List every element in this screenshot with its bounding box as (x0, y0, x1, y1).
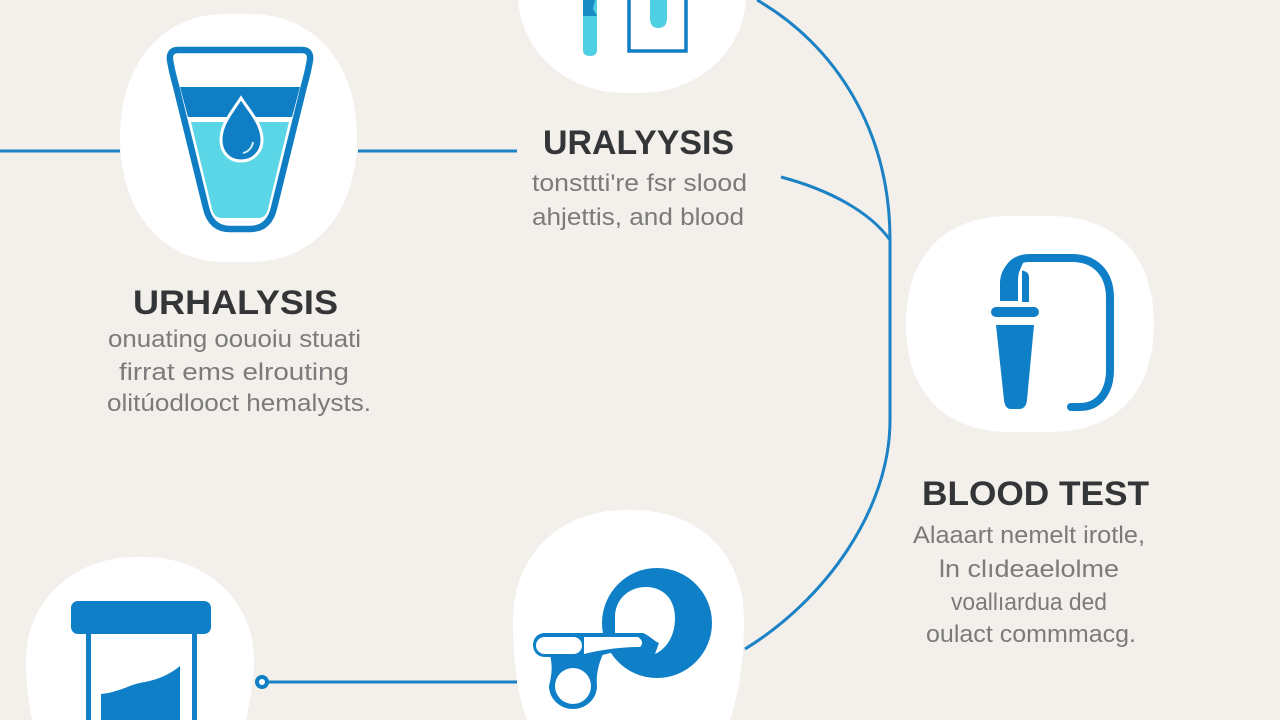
panel: urine cup card (120, 14, 357, 262)
icon: specimen jar (71, 601, 211, 720)
panel: swab and ring card (513, 510, 744, 720)
text block: left description (107, 326, 371, 417)
heading: middle urinalysis: URALYYSIS (543, 124, 734, 162)
text block: left description: firrat ems elrouting (119, 359, 349, 386)
text block: blood test description: Alaaart nemelt irotle, (913, 522, 1145, 549)
icon: test tube and vial (583, 0, 686, 56)
panel: test tube card (518, 0, 746, 93)
icon: dropper with tube (991, 256, 1110, 409)
card background (906, 216, 1154, 432)
text block: middle description (532, 170, 747, 231)
text block: blood test description: voallıardua ded (951, 589, 1107, 616)
panel: specimen jar card (26, 557, 254, 720)
text block: left description: olitúodlooct hemalysts. (107, 390, 371, 417)
card background (26, 557, 254, 720)
panel: blood test card (906, 216, 1154, 432)
icon: urine cup with drop (170, 50, 310, 229)
text block: middle description: tonsttti're fsr slood (532, 170, 747, 197)
card background (120, 14, 357, 262)
connector lines (0, 0, 890, 682)
text block: left description: onuating oouoiu stuati (108, 326, 361, 353)
card background (513, 510, 744, 720)
heading: left urinalysis: URHALYSIS (133, 284, 338, 322)
text block: blood test description (913, 522, 1145, 648)
icon: ring and swab (533, 568, 712, 709)
text block: blood test description: ln clıdeaelolme (939, 556, 1119, 583)
card background (518, 0, 746, 93)
text block: middle description: ahjettis, and blood (532, 204, 744, 231)
connector end dot (257, 677, 267, 687)
heading: blood test: BLOOD TEST (922, 475, 1149, 513)
text block: blood test description: oulact commmacg. (926, 621, 1136, 648)
